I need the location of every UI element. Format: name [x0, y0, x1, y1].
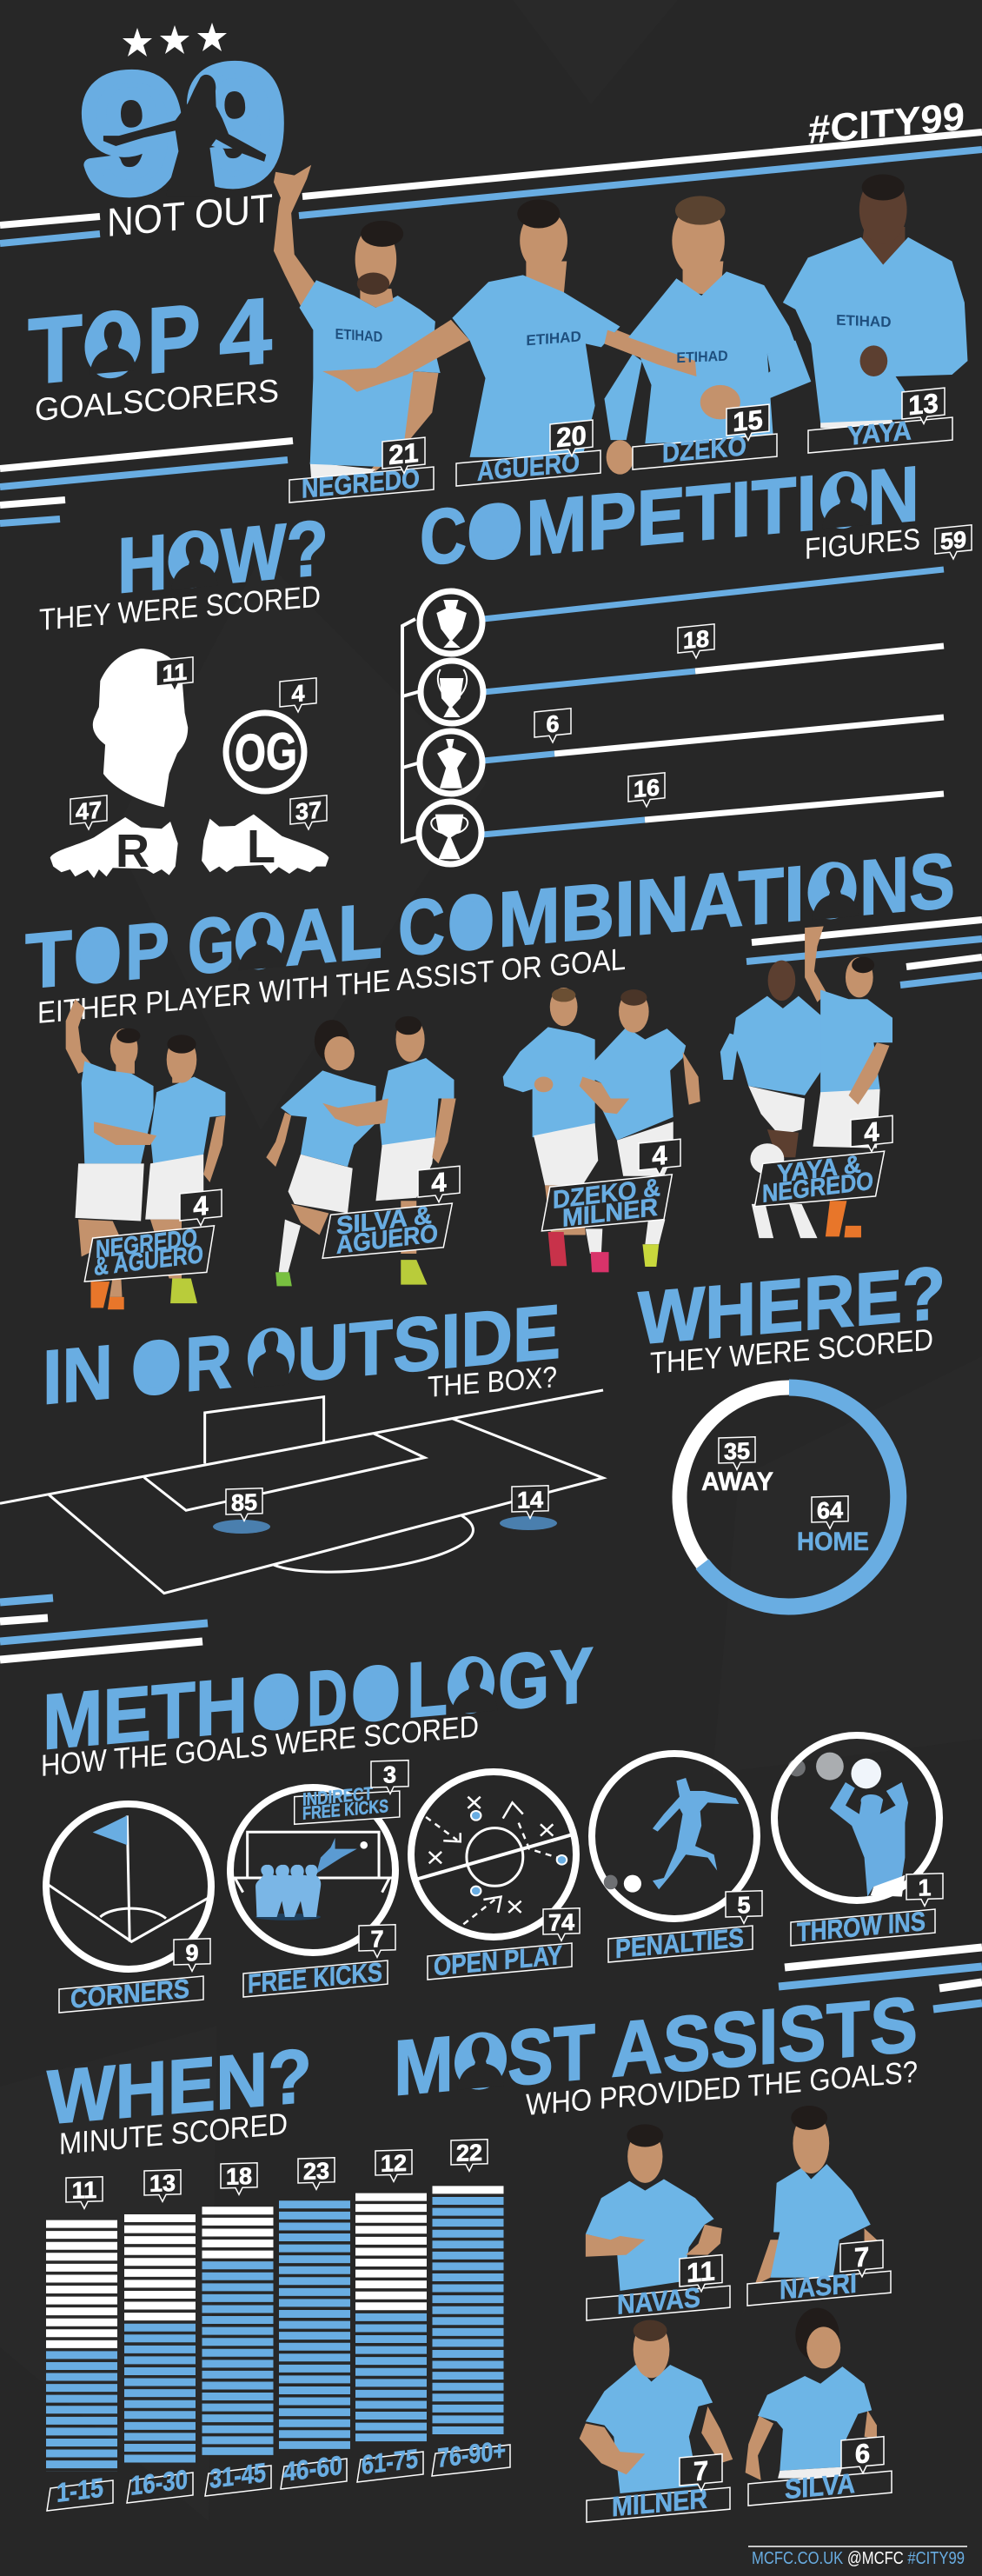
heading: in or outside the box: O — [248, 1312, 295, 1402]
panel: methodology icons — [46, 1735, 943, 2015]
count: 4 — [280, 678, 316, 714]
player: Aguero: ETIHAD — [526, 328, 581, 349]
bar: 76-90+ — [433, 2186, 504, 2438]
player: Yaya: ETIHAD — [836, 312, 891, 330]
player: Silva — [746, 2308, 877, 2480]
count: 18: 18 — [226, 2163, 252, 2190]
count: 16 — [628, 773, 665, 809]
heading: when minute scored: WHEN? — [47, 2032, 312, 2140]
tag: free kicks: FREE KICKS — [248, 1957, 382, 2000]
count: 74: 74 — [548, 1909, 574, 1936]
player silhouette — [103, 75, 266, 196]
heading: methodology: HOW THE GOALS WERE SCORED — [41, 1709, 479, 1783]
label: home: HOME — [797, 1528, 869, 1556]
panel: how scored — [50, 649, 328, 878]
icon: league cup — [419, 802, 481, 864]
count: 37: 37 — [295, 796, 322, 825]
name tag: Yaya: YAYA — [847, 415, 912, 451]
number 99 — [83, 34, 283, 224]
label: away: AWAY — [701, 1468, 773, 1496]
heading: top goal combinations: P — [125, 906, 169, 997]
heading: competition figures: O — [467, 485, 523, 578]
count: 20 — [550, 419, 593, 458]
name tag: Negredo and Aguero: NEGREDO — [96, 1224, 197, 1264]
count: 11 — [66, 2177, 103, 2209]
icon: right boot — [50, 817, 178, 878]
name tag: Nasri — [747, 2264, 891, 2308]
heading: where they were scored: WHERE? — [638, 1251, 946, 1361]
count: 64: 64 — [817, 1497, 843, 1524]
tag: indirect free kicks — [295, 1784, 400, 1824]
count: 1: 1 — [918, 1874, 932, 1901]
heading: in or outside the box: IN — [43, 1328, 113, 1421]
heading: competition figures: N — [867, 449, 919, 542]
count: 21: 21 — [388, 437, 419, 470]
heading: top goal combinations: G — [188, 900, 235, 992]
count: 11: 11 — [687, 2255, 715, 2288]
player: Aguero — [322, 199, 699, 457]
count: 3 — [371, 1761, 408, 1794]
heading: how they were scored: H — [117, 518, 168, 610]
count: 13: 13 — [149, 2170, 176, 2197]
count: 7: 7 — [693, 2455, 708, 2487]
number 99: 9 — [83, 43, 182, 224]
count: 64 — [812, 1496, 848, 1529]
player: Negredo — [274, 165, 441, 480]
count: combo 2 — [418, 1165, 460, 1204]
heading: top goal combinations: EITHER PLAYER WITH THE ASSIST OR GOAL — [37, 942, 626, 1030]
three stars — [123, 23, 227, 57]
heading: how they were scored: THEY WERE SCORED — [39, 580, 321, 637]
number 99: 9 — [188, 34, 283, 216]
count: 9 — [174, 1939, 210, 1972]
spot: outside box — [500, 1516, 557, 1530]
range: 31-45: 31-45 — [209, 2457, 266, 2494]
name tag: Silva: SILVA — [785, 2467, 855, 2505]
count: 6 — [841, 2437, 884, 2475]
name tag: Yaya — [808, 411, 952, 455]
panel: competition bars — [402, 569, 944, 864]
bar: 61-75 — [355, 2193, 427, 2445]
heading: in or outside the box: THE BOX? — [428, 1361, 557, 1404]
heading: top goal combinations: T — [25, 914, 72, 1006]
heading: top 4 goalscorers: 4 — [219, 277, 272, 387]
heading: competition figures: 59 — [940, 526, 966, 555]
count: 22: 22 — [456, 2140, 482, 2167]
heading: how they were scored — [39, 503, 328, 637]
name tag: Dzeko and Milner: MILNER — [562, 1194, 658, 1233]
heading: top goal combinations: MBINATI — [498, 849, 805, 964]
heading: methodology: GY — [498, 1631, 594, 1727]
count: 7 — [840, 2240, 883, 2279]
panel: pitch diagram — [0, 1390, 603, 1594]
bar: 16-30 — [124, 2214, 196, 2466]
heading: top goal combinations: O — [448, 877, 494, 968]
name tag: Yaya and Negredo — [754, 1150, 885, 1208]
count: 14: 14 — [517, 1487, 543, 1514]
count: 37 — [290, 795, 327, 831]
count: 1 — [906, 1874, 943, 1907]
count: 11: 11 — [163, 659, 187, 687]
icon: left boot — [202, 815, 328, 874]
range: 46-60: 46-60 — [283, 2450, 342, 2487]
heading: competition figures — [420, 449, 972, 582]
name tag: Navas: NAVAS — [617, 2281, 700, 2320]
hashtag: #CITY99 — [808, 94, 965, 152]
heading: top goal combinations: O — [806, 845, 858, 937]
bar: 1-15 — [46, 2220, 117, 2472]
count: 47 — [70, 795, 107, 831]
heading: where they were scored: THEY WERE SCORED — [650, 1322, 933, 1381]
count: combo 3: 4 — [652, 1140, 667, 1171]
range: 1-15: 1-15 — [56, 2473, 103, 2508]
heading: competition figures: MPETITI — [526, 459, 817, 573]
panel: combinations — [66, 926, 892, 1309]
name tag: Dzeko — [633, 428, 777, 471]
icon: free kicks — [230, 1787, 395, 1953]
heading: how they were scored: W? — [221, 503, 328, 601]
icon: left boot: L — [247, 821, 275, 873]
players: Yaya and Negredo — [720, 926, 892, 1238]
count: 22 — [451, 2140, 488, 2172]
heading: most assists: ST — [508, 2007, 595, 2103]
count: 11: 11 — [72, 2177, 96, 2204]
count: 23 — [298, 2158, 335, 2190]
icon: own goal: OG — [235, 722, 297, 782]
icon: corners — [46, 1804, 211, 1969]
heading: most assists: O — [454, 2015, 508, 2107]
name tag: Navas — [587, 2279, 730, 2323]
heading: in or outside the box — [43, 1288, 561, 1421]
ring: blue home — [702, 1388, 899, 1607]
heading: top goal combinations: AL — [285, 887, 382, 983]
range: 16-30: 16-30 — [130, 2464, 188, 2501]
name tag: Negredo and Aguero: & AGUERO — [94, 1241, 203, 1281]
count: 35 — [719, 1437, 755, 1470]
heading: competition figures: C — [420, 490, 467, 582]
heading: in or outside the box: R — [185, 1318, 232, 1408]
count: 4: 4 — [291, 680, 305, 708]
name tag: Silva and Aguero: SILVA & — [336, 1201, 432, 1241]
icon: penalties — [592, 1754, 757, 1919]
count: 6 — [534, 709, 571, 744]
bar: champions league — [483, 646, 944, 692]
icon: own goal — [226, 713, 304, 791]
count: 85 — [226, 1488, 262, 1521]
count: 13 — [902, 387, 945, 426]
player: Dzeko — [604, 196, 811, 475]
count: 9: 9 — [185, 1940, 199, 1967]
name tag: Nasri: NASRI — [780, 2267, 857, 2306]
heading: top 4 goalscorers: GOALSCORERS — [35, 372, 279, 428]
count: 47: 47 — [76, 796, 102, 825]
panel: home and away ring — [680, 1388, 899, 1607]
players: Silva and Aguero — [266, 1016, 456, 1286]
name tag: Yaya and Negredo: YAYA & — [777, 1150, 861, 1188]
name tag: Dzeko and Milner — [541, 1174, 672, 1233]
count: 18: 18 — [683, 625, 709, 654]
count: combo 1: 4 — [193, 1190, 209, 1221]
footer: MCFC.CO.UK @MCFC #CITY99 — [752, 2549, 965, 2568]
ring: white away — [680, 1388, 899, 1607]
name tag: Silva — [748, 2464, 892, 2508]
tag: penalties: PENALTIES — [615, 1922, 744, 1964]
stripes: right — [746, 920, 982, 985]
bar: FA cup — [483, 717, 944, 761]
count: 12: 12 — [381, 2150, 407, 2177]
range: 61-75: 61-75 — [362, 2443, 418, 2480]
bar: 31-45 — [202, 2207, 273, 2458]
count: 23: 23 — [303, 2158, 329, 2185]
count: 11 — [156, 657, 193, 693]
heading: top goal combinations: O — [74, 909, 122, 1002]
count: 5 — [726, 1891, 762, 1924]
count: 3: 3 — [383, 1761, 396, 1788]
spot: inside box — [213, 1520, 270, 1534]
heading: most assists — [394, 1980, 918, 2122]
count: 15 — [727, 403, 769, 443]
count: 12 — [375, 2150, 412, 2182]
count: combo 1 — [180, 1188, 222, 1228]
heading: top goal combinations: O — [235, 895, 285, 988]
heading: methodology: METH — [43, 1661, 248, 1767]
icon: FA cup — [420, 731, 482, 794]
icon: open play — [411, 1772, 576, 1937]
count: 14 — [512, 1486, 548, 1519]
count: 7 — [680, 2454, 722, 2493]
count: combo 3 — [639, 1138, 680, 1177]
heading: how they were scored: O — [168, 514, 219, 606]
heading: competition figures: O — [820, 455, 867, 546]
heading: most assists: ASSISTS — [611, 1980, 918, 2094]
player: Yaya — [783, 174, 967, 428]
count: 7: 7 — [370, 1926, 384, 1953]
heading: top goal combinations: NS — [859, 836, 955, 932]
panel: assists players — [580, 2106, 892, 2525]
heading: when minute scored: MINUTE SCORED — [59, 2107, 288, 2161]
panel: top scorers — [274, 165, 967, 505]
count: 21 — [382, 436, 425, 476]
heading: top goal combinations — [25, 836, 955, 1030]
count: 6: 6 — [546, 710, 560, 738]
bracket — [402, 619, 421, 842]
heading: methodology: O — [252, 1656, 301, 1748]
range: 76-90+: 76-90+ — [437, 2435, 506, 2473]
heading: in or outside the box: O — [131, 1322, 182, 1413]
name tag: Silva and Aguero: AGUERO — [336, 1220, 438, 1260]
count: 15: 15 — [733, 404, 763, 437]
count: 18 — [678, 624, 714, 660]
player: Dzeko: ETIHAD — [676, 348, 728, 366]
heading: methodology: O — [448, 1640, 494, 1731]
name tag: Milner — [587, 2480, 730, 2525]
name tag: Yaya and Negredo: NEGREDO — [762, 1168, 873, 1208]
heading: top 4 goalscorers — [28, 277, 279, 428]
heading: competition figures: FIGURES — [805, 523, 920, 566]
name tag: Negredo and Aguero — [84, 1224, 214, 1281]
count: 20: 20 — [556, 420, 587, 453]
name tag: Milner: MILNER — [612, 2483, 707, 2522]
player: Negredo: ETIHAD — [335, 327, 382, 345]
name tag: Silva and Aguero — [322, 1201, 452, 1260]
bar chart counts and ranges — [47, 2140, 510, 2511]
count: 35: 35 — [724, 1438, 750, 1465]
icon: right boot: R — [116, 825, 149, 877]
pitch lines — [0, 1390, 603, 1594]
bar: league — [483, 569, 944, 619]
heading: top 4 goalscorers: O — [84, 289, 141, 399]
name tag: Negredo: NEGREDO — [302, 463, 420, 504]
tag: open play: OPEN PLAY — [434, 1940, 562, 1981]
logo: 99 not out — [83, 23, 283, 245]
bar: 46-60 — [279, 2200, 350, 2452]
players: Dzeko and Milner — [503, 988, 700, 1272]
count: combo 4: 4 — [864, 1116, 879, 1148]
count: 7 — [359, 1925, 395, 1958]
count: 5: 5 — [737, 1892, 751, 1919]
heading: methodology: O — [351, 1647, 401, 1740]
heading: most assists: M — [394, 2020, 454, 2113]
stripes: mid left — [0, 1598, 208, 1660]
players: Negredo and Aguero — [66, 999, 225, 1309]
tag: indirect free kicks: INDIRECT — [302, 1784, 373, 1810]
heading: top goal combinations: C — [398, 882, 445, 973]
stripes: top — [0, 132, 982, 243]
count: 16: 16 — [634, 774, 660, 802]
count: 7: 7 — [854, 2241, 869, 2273]
count: 85: 85 — [231, 1489, 257, 1516]
count: 18 — [221, 2163, 257, 2195]
player: Navas — [586, 2124, 722, 2291]
tag: throw ins: THROW INS — [797, 1906, 926, 1947]
icon: premier league trophy — [420, 591, 482, 654]
name tag: Dzeko: DZEKO — [662, 430, 746, 469]
player: Nasri — [742, 2106, 883, 2315]
heading: methodology: D — [307, 1653, 348, 1744]
bar chart: minute scored — [82, 2186, 468, 2472]
name tag: Aguero: AGUERO — [477, 447, 580, 487]
player: Milner — [580, 2320, 733, 2493]
tag: indirect free kicks: FREE KICKS — [302, 1796, 388, 1824]
heading: in or outside the box: UTSIDE — [297, 1288, 561, 1398]
heading: methodology — [41, 1631, 594, 1783]
icon: head — [93, 649, 188, 807]
heading: top 4 goalscorers: P — [147, 283, 201, 394]
stripes: left — [0, 441, 293, 523]
bar: league cup — [482, 794, 944, 835]
icon: champions league trophy — [421, 661, 483, 723]
count: 11 — [680, 2255, 722, 2293]
count: 13: 13 — [908, 388, 939, 421]
not out: NOT OUT — [107, 185, 273, 245]
count: 6: 6 — [855, 2438, 870, 2470]
stripes: lower right — [779, 1947, 982, 2009]
count: combo 2: 4 — [431, 1167, 447, 1198]
name tag: Dzeko and Milner: DZEKO & — [553, 1174, 660, 1215]
heading: top 4 goalscorers: T — [28, 295, 83, 404]
heading: methodology: L — [407, 1644, 448, 1735]
count: 13 — [144, 2170, 181, 2202]
heading: most assists: WHO PROVIDED THE GOALS? — [526, 2055, 918, 2122]
count: combo 4 — [851, 1115, 892, 1154]
icon: throw ins — [774, 1735, 939, 1900]
tag: corners: CORNERS — [70, 1974, 189, 2014]
count: 74 — [543, 1908, 580, 1941]
